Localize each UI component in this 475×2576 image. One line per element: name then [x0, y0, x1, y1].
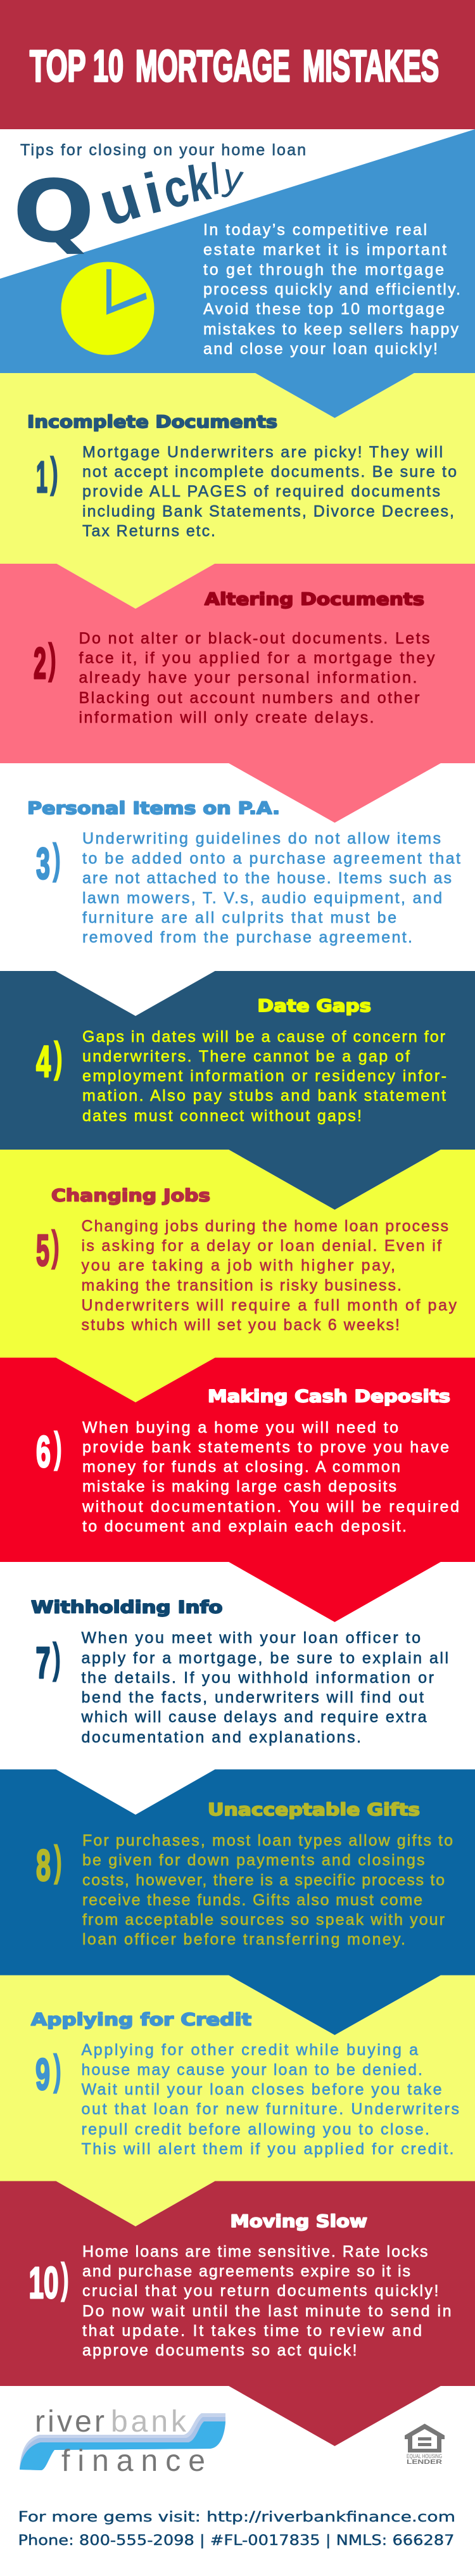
body text: When you meet with your loan officer to: [81, 1629, 421, 1647]
heading: Personal Items on P.A.: [27, 799, 280, 818]
body text: furniture are all culprits that must be: [82, 909, 396, 927]
body text: [82, 1832, 453, 1948]
intro text: In today’s competitive real: [203, 221, 427, 239]
panel: 4 Date Gaps: [0, 971, 475, 1210]
number: ): [53, 2046, 61, 2094]
body text: already have your personal information.: [79, 669, 417, 687]
body text: Mortgage Underwriters are picky! They will: [82, 443, 443, 461]
body text: lawn mowers, T. V.s, audio equipment, and: [82, 889, 442, 907]
panel: 6 Making Cash Deposits: [0, 1358, 475, 1622]
number: 6: [36, 1427, 51, 1476]
body text: which will cause delays and require extra: [81, 1708, 427, 1726]
panel: 7 Withholding Info: [0, 1562, 475, 1815]
body text: [82, 443, 457, 540]
body text: out that loan for new furniture. Underwriters: [81, 2100, 459, 2118]
contact text: Phone: 800-555-2098 | #FL-0017835 | NMLS: 666287: [18, 2533, 455, 2549]
body text: without documentation. You will be required: [82, 1498, 459, 1516]
icon: equal housing lender: EQUAL HOUSING: [407, 2453, 442, 2459]
body text: Do not alter or black-out documents. Lets: [79, 630, 429, 647]
body text: Changing jobs during the home loan process: [81, 1217, 448, 1235]
intro text: estate market it is important: [203, 241, 446, 258]
body text: Gaps in dates will be a cause of concern for: [82, 1028, 445, 1046]
body text: house may cause your loan to be denied.: [81, 2061, 422, 2079]
body text: costs, however, there is a specific process to: [82, 1871, 445, 1889]
intro text: [203, 221, 460, 358]
body text: apply for a mortgage, be sure to explain all: [81, 1649, 448, 1667]
body text: [82, 1419, 459, 1535]
body text: repull credit before allowing you to close.: [81, 2121, 429, 2138]
body text: are not attached to the house. Items such as: [82, 869, 452, 887]
body text: is asking for a delay or loan denial. Even if: [81, 1237, 441, 1255]
body text: the details. If you withhold information or: [81, 1669, 434, 1687]
number: 10: [29, 2258, 58, 2307]
intro text: Avoid these top 10 mortgage: [203, 300, 445, 318]
heading: Applying for Credit: [31, 2010, 251, 2029]
body text: and purchase agreements expire so it is: [82, 2262, 410, 2280]
body text: [82, 1028, 446, 1125]
body text: crucial that you return documents quickly!: [82, 2282, 438, 2300]
body text: bend the facts, underwriters will find out: [81, 1689, 424, 1706]
heading: Moving Slow: [231, 2212, 367, 2231]
body text: to be added onto a purchase agreement that: [82, 850, 460, 868]
number: 8: [36, 1841, 51, 1890]
body text: underwriters. There cannot be a gap of: [82, 1048, 410, 1065]
number: 4: [36, 1037, 51, 1086]
body text: [82, 2243, 451, 2359]
panel: 5 Changing Jobs: [0, 1150, 475, 1402]
intro text: process quickly and efficiently.: [203, 281, 460, 298]
number: ): [53, 835, 61, 883]
icon: equal housing lender: [405, 2423, 445, 2466]
logo: riverbank finance: finance: [61, 2444, 205, 2478]
body text: provide bank statements to prove you have: [82, 1438, 449, 1456]
logo: riverbank finance: bank: [111, 2405, 187, 2439]
number: 1: [36, 452, 48, 502]
body text: receive these funds. Gifts also must come: [82, 1891, 422, 1909]
word: Quickly: c: [157, 156, 194, 220]
number: ): [53, 1634, 61, 1682]
body text: [79, 630, 435, 726]
word: Quickly: i: [138, 161, 168, 226]
word: Quickly: l: [208, 154, 222, 204]
body text: from acceptable sources so speak with your: [82, 1911, 445, 1929]
title: MORTGAGE: [136, 41, 290, 91]
panel: intro: [0, 129, 475, 418]
body text: For purchases, most loan types allow gifts to: [82, 1832, 453, 1850]
body text: approve documents so act quick!: [82, 2342, 357, 2359]
body text: Tax Returns etc.: [82, 522, 215, 540]
number: ): [50, 448, 58, 497]
icon: clock: [61, 262, 155, 355]
body text: Underwriting guidelines do not allow items: [82, 830, 441, 847]
heading: Incomplete Documents: [27, 412, 277, 432]
number: 2: [34, 638, 46, 688]
heading: Date Gaps: [257, 996, 371, 1016]
panel: 9 Applying for Credit: [0, 1975, 475, 2226]
intro text: mistakes to keep sellers happy: [203, 320, 459, 338]
body text: This will alert them if you applied for credit.: [81, 2140, 453, 2158]
number: ): [48, 635, 56, 683]
body text: that update. It takes time to review and: [82, 2322, 422, 2340]
body text: not accept incomplete documents. Be sure to: [82, 463, 457, 481]
body text: face it, if you applied for a mortgage they: [79, 649, 435, 667]
panel: footer: [0, 2386, 475, 2576]
body text: When buying a home you will need to: [82, 1419, 398, 1437]
body text: information will only create delays.: [79, 709, 374, 726]
heading: Altering Documents: [205, 590, 424, 609]
body text: Blacking out account numbers and other: [79, 689, 419, 707]
body text: stubs which will set you back 6 weeks!: [81, 1316, 400, 1334]
body text: employment information or residency infor-: [82, 1067, 446, 1085]
body text: [81, 1217, 457, 1334]
word: Quickly: Q: [13, 162, 94, 262]
intro text: and close your loan quickly!: [203, 340, 438, 358]
body text: [82, 830, 460, 946]
logo swoosh: [20, 2413, 225, 2470]
panel: 8 Unacceptable Gifts: [0, 1770, 475, 2035]
panel: header: [0, 0, 475, 129]
number: ): [54, 1033, 63, 1081]
body text: Do now wait until the last minute to send in: [82, 2302, 451, 2320]
body text: [81, 2041, 459, 2158]
panel: 10 Moving Slow: [0, 2181, 475, 2446]
body text: Home loans are time sensitive. Rate locks: [82, 2243, 428, 2261]
number: 5: [36, 1226, 49, 1275]
heading: Making Cash Deposits: [208, 1387, 450, 1406]
body text: Applying for other credit while buying a: [81, 2041, 418, 2059]
intro text: to get through the mortgage: [203, 261, 444, 279]
number: ): [61, 2254, 69, 2302]
body text: [81, 1629, 448, 1746]
word: Quickly: y: [220, 155, 246, 200]
number: ): [54, 1837, 62, 1885]
subtitle: Tips for closing on your home loan: [20, 141, 306, 159]
panel: 3 Personal Items on P.A.: [0, 763, 475, 1016]
number: 9: [35, 2050, 50, 2099]
body text: documentation and explanations.: [81, 1729, 361, 1746]
word: Quickly: k: [184, 153, 214, 213]
word: Quickly: [13, 153, 246, 262]
number: ): [54, 1423, 62, 1471]
icon: equal housing lender: LENDER: [407, 2459, 443, 2466]
heading: Unacceptable Gifts: [208, 1800, 420, 1820]
body text: mistake is making large cash deposits: [82, 1478, 396, 1495]
body text: be given for down payments and closings: [82, 1851, 424, 1869]
contact text: [18, 2509, 455, 2549]
body text: including Bank Statements, Divorce Decrees,: [82, 503, 454, 521]
body text: Underwriters will require a full month of pay: [81, 1297, 457, 1314]
panel: 2 Altering Documents: [0, 564, 475, 823]
title: TOP 10: [30, 41, 124, 91]
contact text: For more gems visit: http://riverbankfinance.com: [18, 2509, 455, 2525]
number: ): [51, 1222, 60, 1270]
body text: mation. Also pay stubs and bank statement: [82, 1087, 446, 1105]
panel: 1 Incomplete Documents: [0, 373, 475, 609]
word: Quickly: u: [91, 161, 149, 240]
body text: loan officer before transferring money.: [82, 1931, 405, 1948]
body text: provide ALL PAGES of required documents: [82, 483, 440, 500]
body text: Wait until your loan closes before you take: [81, 2081, 441, 2098]
logo: riverbank finance: river: [35, 2405, 104, 2439]
body text: you are taking a job with higher pay,: [81, 1257, 395, 1274]
body text: to document and explain each deposit.: [82, 1518, 407, 1535]
heading: Changing Jobs: [51, 1186, 210, 1206]
body text: making the transition is risky business.: [81, 1277, 402, 1295]
logo: riverbank finance: [20, 2405, 225, 2478]
number: 7: [35, 1638, 51, 1687]
number: 3: [36, 839, 50, 888]
body text: removed from the purchase agreement.: [82, 929, 412, 946]
heading: Withholding Info: [31, 1597, 223, 1618]
body text: dates must connect without gaps!: [82, 1107, 362, 1125]
body text: money for funds at closing. A common: [82, 1458, 400, 1476]
